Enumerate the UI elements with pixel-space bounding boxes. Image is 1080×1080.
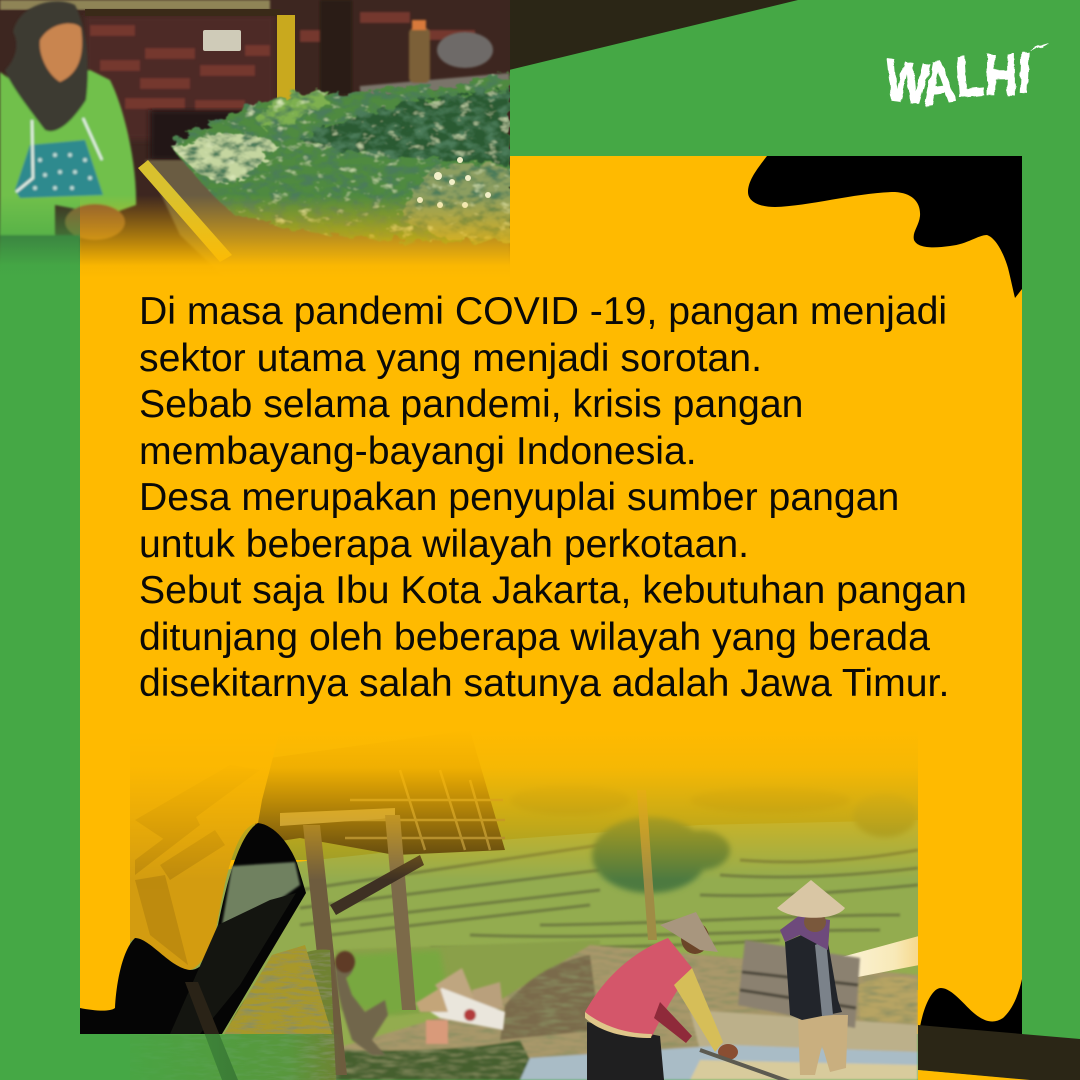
logo: WALHI: L	[952, 43, 986, 110]
wooden crate	[738, 940, 860, 1028]
dark diagonal band: top	[505, 0, 798, 71]
bamboo pole	[638, 801, 657, 940]
terraces	[300, 845, 918, 948]
distant trees	[231, 764, 918, 860]
body text: Sebut saja Ibu Kota Jakarta, kebutuhan pangan	[139, 569, 967, 612]
straw ground	[330, 945, 918, 1080]
panel: yellow text panel	[80, 156, 1022, 1034]
logo accent stroke	[1030, 43, 1049, 51]
green tint: lower left of photo	[130, 1034, 342, 1080]
roof	[255, 766, 505, 855]
wave overlay: bottom left	[80, 823, 332, 1080]
woman	[0, 1, 136, 278]
body text: membayang-bayangi Indonesia.	[139, 430, 697, 473]
yellow haze fade	[130, 730, 918, 880]
body text: untuk beberapa wilayah perkotaan.	[139, 523, 749, 566]
dark wreckage in wave	[170, 893, 296, 1034]
table surface	[144, 159, 510, 258]
roof beam	[280, 808, 395, 826]
photo: woman sorting vegetables	[0, 0, 510, 278]
conical hat	[777, 880, 845, 918]
tree cluster	[590, 816, 915, 896]
fade to yellow	[80, 195, 510, 278]
table edge: yellow	[138, 160, 232, 262]
farmer with black jacket	[777, 880, 848, 1075]
body text: ditunjang oleh beberapa wilayah yang berada	[139, 616, 930, 659]
body text: Sebab selama pandemi, krisis pangan	[139, 383, 803, 426]
rake handle	[700, 1050, 790, 1080]
logo: WALHI: I	[1017, 40, 1033, 106]
hut posts	[303, 825, 347, 1075]
apron	[15, 140, 103, 198]
farmer with red shirt	[585, 912, 790, 1080]
white plank	[838, 936, 919, 977]
yellow strip: bottom	[918, 1070, 1030, 1080]
seated man	[335, 951, 388, 1055]
greens on table	[170, 72, 510, 242]
grain sacks	[416, 968, 505, 1044]
body text: sektor utama yang menjadi sorotan.	[139, 337, 762, 380]
yellow pillar	[277, 15, 295, 105]
lower slope	[335, 940, 600, 1015]
logo: WALHI	[883, 40, 1049, 118]
shelf with bottle and bag	[360, 20, 510, 98]
conical hat	[660, 912, 718, 952]
pole through wave	[185, 982, 238, 1080]
black wave shape	[80, 823, 306, 1034]
hands	[65, 204, 125, 240]
dark diagonal band: bottom	[918, 1025, 1080, 1080]
translucent yellow shape	[130, 758, 272, 970]
hut	[255, 766, 505, 1075]
icon: wall socket	[203, 30, 241, 51]
roof tiles in haze	[135, 765, 260, 965]
body text	[139, 290, 967, 705]
hut diagonal brace	[330, 855, 424, 915]
face	[40, 24, 82, 82]
photo: rice field and farmers	[130, 730, 919, 1080]
logo: WALHI: W	[883, 47, 932, 116]
logo: WALHI: H	[985, 43, 1017, 108]
body text: Di masa pandemi COVID -19, pangan menjadi	[139, 290, 947, 333]
logo: WALHI: A	[919, 50, 958, 118]
photo background: brick wall	[0, 0, 510, 278]
hijab	[5, 1, 88, 131]
rice field	[130, 820, 918, 1048]
body text: Desa merupakan penyuplai sumber pangan	[139, 476, 899, 519]
black blob: top right corner	[748, 156, 1022, 298]
black blob: bottom right corner	[919, 979, 1022, 1036]
rice bundle foreground	[160, 950, 336, 1080]
body text: disekitarnya salah satunya adalah Jawa Timur.	[139, 662, 949, 705]
fade to green	[0, 206, 80, 278]
field seen through wave	[222, 862, 300, 925]
green blouse	[0, 70, 136, 250]
yellow rice bundle	[224, 945, 332, 1034]
